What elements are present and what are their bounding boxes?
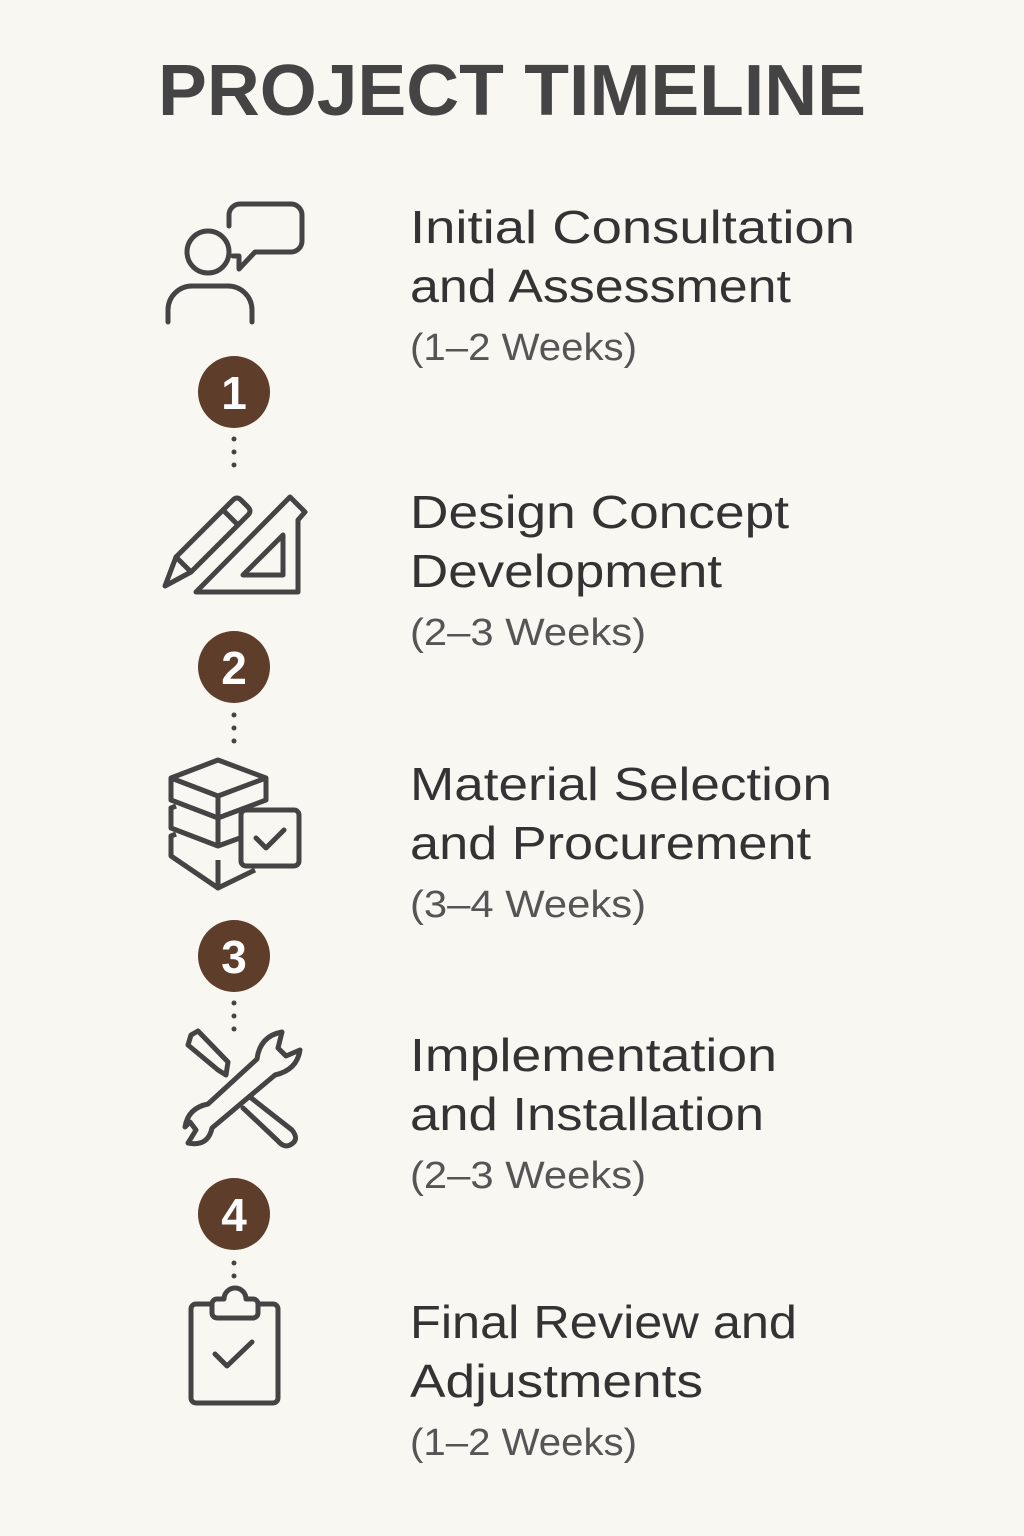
text: step 5: Adjustments xyxy=(410,1355,703,1407)
icon: clipboard xyxy=(191,1288,278,1403)
text: step 2: Development xyxy=(410,545,722,597)
icon: materials xyxy=(171,760,299,888)
text: step 5: (1–2 Weeks) xyxy=(410,1422,637,1464)
text: step 4: Implementation xyxy=(410,1029,777,1081)
text: step 5: Final Review and xyxy=(410,1296,797,1348)
text: step 3 xyxy=(410,758,832,926)
step 2 xyxy=(198,631,270,703)
step 4 xyxy=(198,1178,270,1250)
connector 3 xyxy=(232,1000,236,1032)
text: step 3: (3–4 Weeks) xyxy=(410,884,646,926)
text: step 2: Design Concept xyxy=(410,486,789,538)
icon: tools xyxy=(185,1031,300,1146)
icon: consultation xyxy=(168,204,302,322)
text: step 3: and Procurement xyxy=(410,817,811,869)
text: step 1: (1–2 Weeks) xyxy=(410,327,637,369)
text: step 1: Initial Consultation xyxy=(410,201,855,253)
text: step 4: and Installation xyxy=(410,1088,764,1140)
step 2: 2 xyxy=(221,642,247,694)
step 3: 3 xyxy=(221,931,247,983)
connector 2 xyxy=(232,712,236,744)
step 3 xyxy=(198,920,270,992)
connector 1 xyxy=(232,436,236,468)
connector 4 xyxy=(232,1260,236,1278)
icon: design xyxy=(165,497,305,592)
text: step 1 xyxy=(410,201,855,369)
text: step 4: (2–3 Weeks) xyxy=(410,1155,646,1197)
text: step 3: Material Selection xyxy=(410,758,832,810)
step 1 xyxy=(198,356,270,428)
text: step 2 xyxy=(410,486,789,654)
text: step 1: and Assessment xyxy=(410,260,791,312)
step 1: 1 xyxy=(221,367,247,419)
text: step 4 xyxy=(410,1029,777,1197)
title: PROJECT TIMELINE xyxy=(158,51,866,131)
step 4: 4 xyxy=(221,1189,247,1241)
text: step 2: (2–3 Weeks) xyxy=(410,612,646,654)
text: step 5 xyxy=(410,1296,797,1464)
